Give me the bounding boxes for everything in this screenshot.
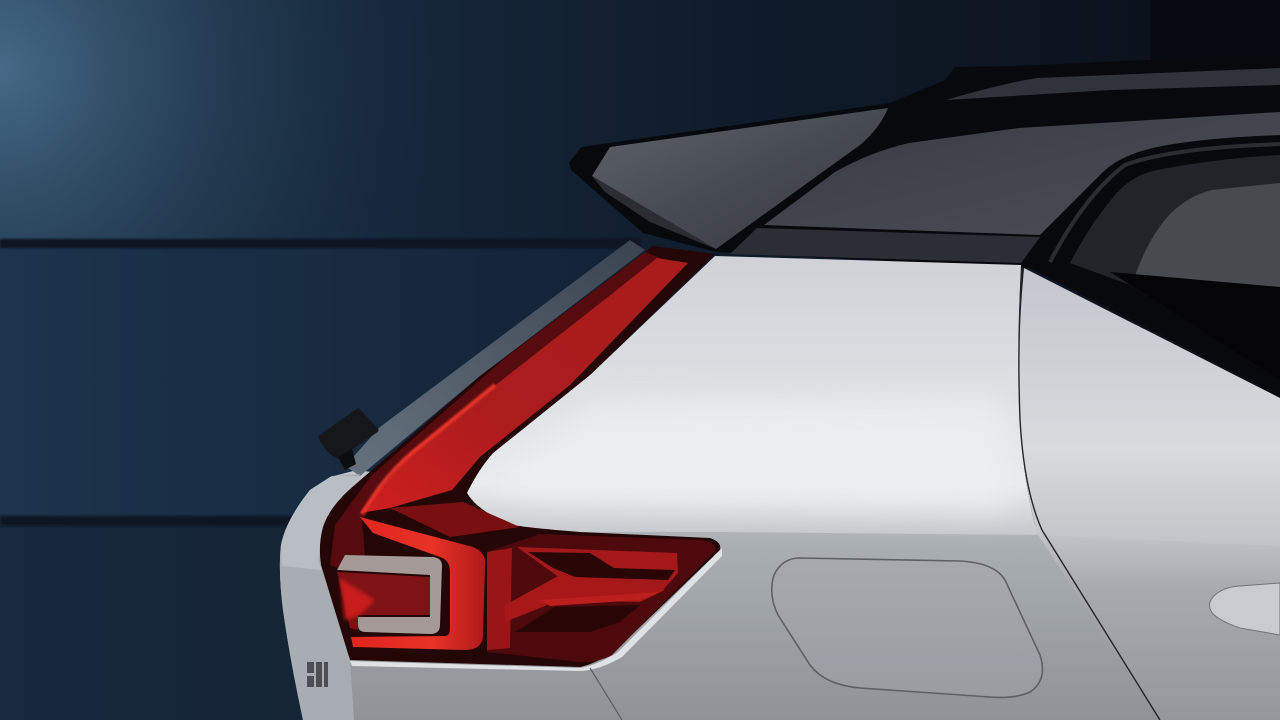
right door panel [1019,268,1280,548]
badge [307,662,328,687]
panel highlight [490,400,1010,510]
tail light [320,246,720,667]
black window band [1028,266,1280,396]
lamp housing [320,246,720,667]
lower body panel [280,470,1280,720]
right lamp section [487,534,716,662]
upper roof-side panel [764,112,1280,235]
reverse lamp [337,555,442,634]
lower bright light blade [351,517,485,650]
lower door panel [1038,535,1280,720]
rear side window [1050,144,1280,380]
main white body panel [467,256,1038,535]
pillar trim strip [730,228,1040,263]
roof and spoiler silhouette [569,54,1280,398]
inner red reflector [337,572,430,630]
centre wedge [390,502,520,537]
roof rail highlight [946,68,1280,100]
window frame line [1050,144,1280,262]
fuel flap [772,558,1042,697]
door handle [1210,583,1280,635]
upper red bar [360,258,688,513]
lamp lower edge trim [350,548,722,671]
spoiler lower face [592,176,716,249]
rear pillar grey strip [345,240,645,476]
bright ridge [362,385,495,514]
dark slats upper [528,552,675,580]
window reflection [1136,183,1280,287]
LED dark band [330,252,660,570]
camera [321,411,376,470]
spoiler panel [592,108,888,249]
rear corner panel [280,474,360,720]
bumper seam [590,668,622,720]
dark slats lower [515,605,640,632]
door seam [1019,268,1160,720]
red middle blade [505,575,665,622]
